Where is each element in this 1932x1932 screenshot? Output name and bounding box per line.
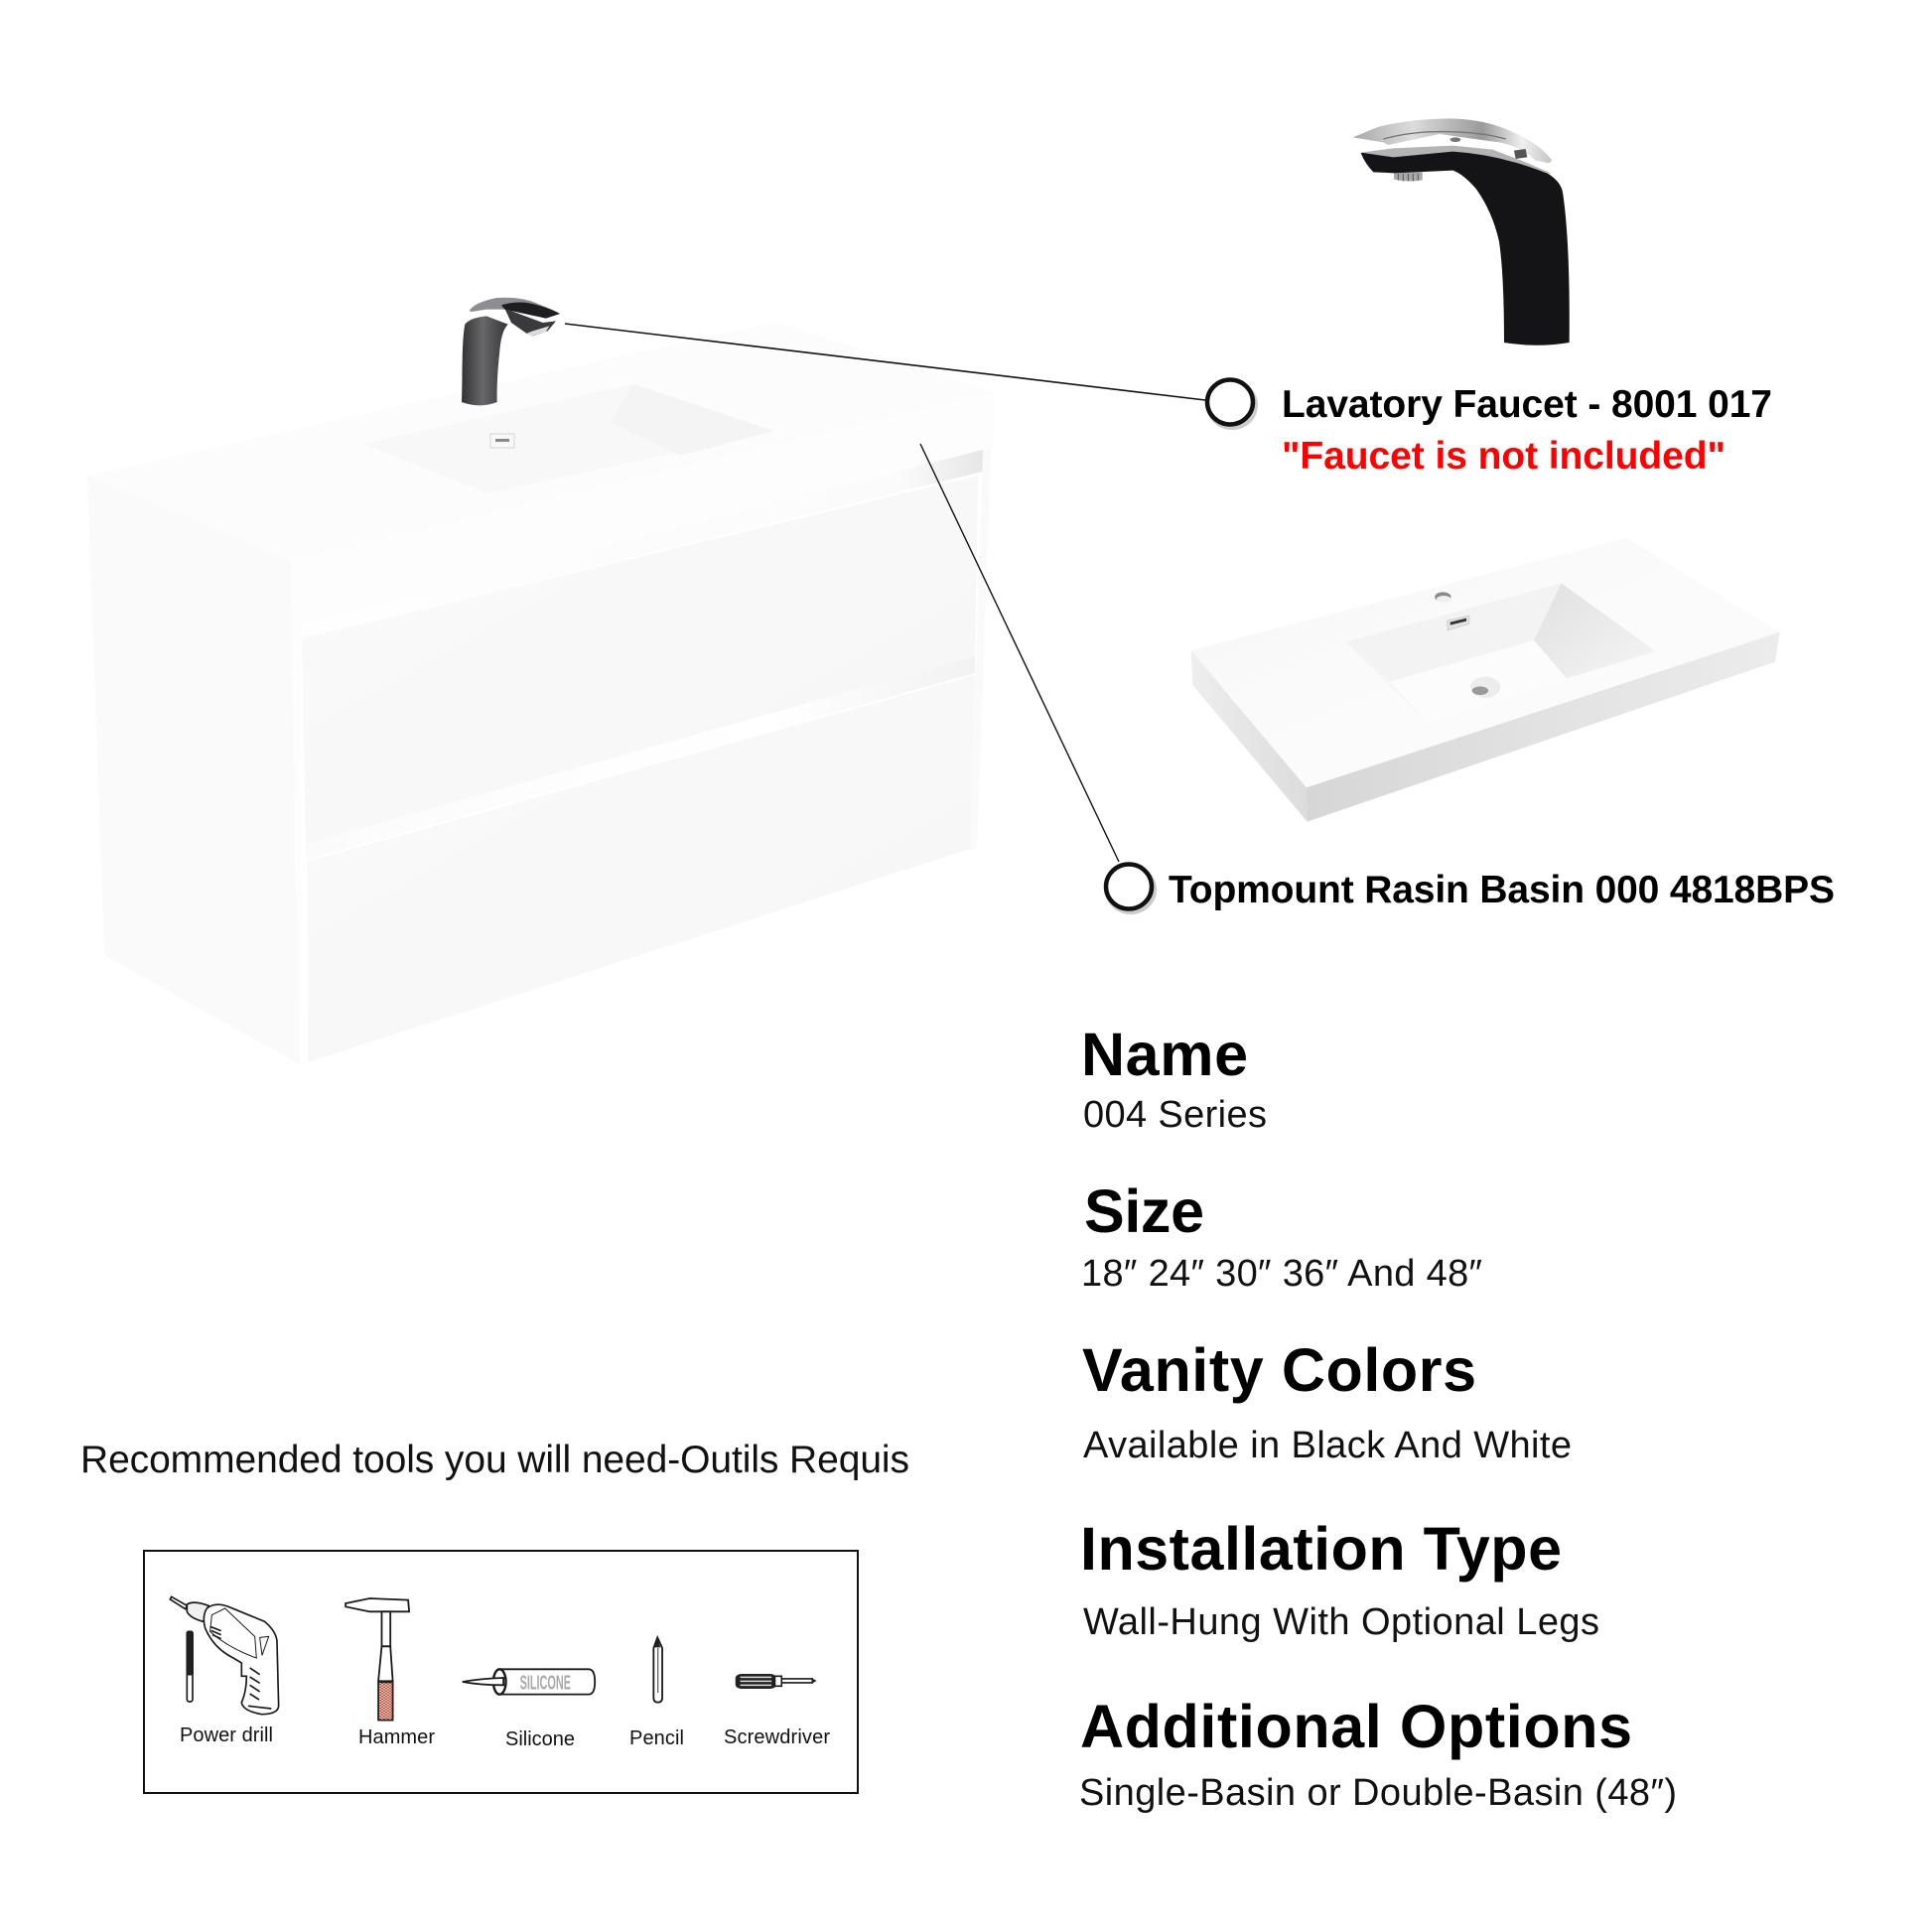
spec: additional options value: Single-Basin or Double-Basin (48″) [1079,1772,1677,1814]
icon: screwdriver [736,1674,817,1689]
faucet not included warning: "Faucet is not included" [1282,435,1725,478]
lower drawer front [307,675,975,1062]
basin callout marker [1106,864,1155,912]
faucet callout marker [1207,379,1256,428]
spec: vanity colors heading: Vanity Colors [1082,1336,1476,1404]
tool label: power drill: Power drill [180,1725,273,1746]
tools panel [144,1551,858,1793]
faucet callout label: Lavatory Faucet - 8001 017 [1282,383,1772,426]
large faucet photo [1353,118,1570,345]
small faucet on vanity [462,298,560,405]
tool label: silicone: Silicone [505,1728,575,1750]
spec: name value: 004 Series [1083,1094,1267,1136]
leader line to faucet callout [565,324,1205,400]
spec: vanity colors value: Available in Black And White [1083,1425,1572,1466]
vanity cabinet [87,322,995,1064]
icon: pencil [653,1637,662,1703]
upper drawer front [302,476,978,844]
icon: power drill [170,1596,279,1715]
cabinet left side [87,476,299,1064]
tool label: hammer: Hammer [358,1726,435,1748]
tool label: pencil: Pencil [629,1727,684,1749]
spec: size value: 18″ 24″ 30″ 36″ And 48″ [1081,1253,1482,1295]
tool label: screwdriver: Screwdriver [724,1726,830,1748]
recommended tools heading: Recommended tools you will need-Outils Requis [80,1439,909,1481]
integrated sink bowl [363,384,773,493]
cabinet right edge [970,449,991,851]
leader line to basin callout [920,444,1119,862]
icon: silicone tube [463,1669,595,1695]
spec: installation type value: Wall-Hung With Optional Legs [1083,1601,1599,1643]
spec: additional options heading: Additional Options [1080,1693,1632,1760]
basin photo [1191,538,1780,822]
icon: hammer [345,1598,409,1721]
upper drawer finger slot [301,450,983,638]
spec: installation type heading: Installation Type [1080,1515,1562,1583]
spec: size heading: Size [1084,1177,1204,1245]
spec: name heading: Name [1081,1021,1248,1088]
tools panel frame [144,1551,858,1793]
countertop front edge [291,392,995,1064]
basin callout label: Topmount Rasin Basin 000 4818BPS [1169,869,1835,911]
countertop surface [87,322,994,561]
lower drawer finger slot [306,656,975,860]
icon: silicone tube: SILICONE [520,1672,571,1695]
